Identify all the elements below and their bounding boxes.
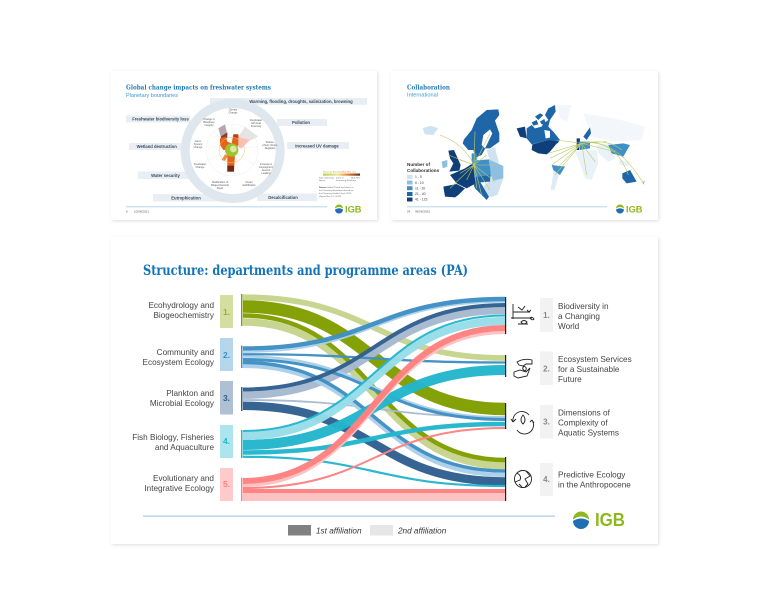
impact labels: [126, 98, 367, 202]
legend: number of collaborations: [407, 162, 440, 202]
icon: complexity water cycle: [511, 411, 534, 434]
legend: control variable: the Planetary Boundaries based on: [319, 189, 354, 192]
logo: IGB: [616, 204, 643, 214]
chart labels: Ocean: [245, 181, 253, 184]
impact label text: Decalcification: [268, 195, 298, 200]
chart labels: with beat: [251, 122, 261, 125]
department number boxes: 5.: [223, 479, 230, 489]
chart labels: Biosphere: [203, 121, 215, 124]
legend: control variable: (Figure Rev 2.1, 2023): [319, 195, 341, 198]
programme area labels: Aquatic Systems: [558, 428, 619, 438]
legend: number of collaborations: 21 - 40: [415, 192, 426, 196]
logo: IGB: IGB: [626, 204, 643, 214]
chart labels: Freshwater: [194, 163, 206, 166]
logo: IGB: IGB: [595, 510, 625, 530]
programme area labels: for a Sustainable: [558, 365, 620, 374]
chart labels: Acidification: [242, 184, 256, 187]
icon: globe with arrows: [514, 470, 532, 488]
chart labels: [194, 108, 278, 190]
chart labels: pheric Ozone: [263, 144, 278, 147]
logo: IGB: IGB: [345, 204, 362, 214]
legend: control variable: Global Threat and status of: [327, 186, 354, 189]
department number boxes: [220, 295, 233, 501]
map: world: [517, 105, 645, 190]
programme area labels: World: [558, 322, 580, 331]
logo: IGB: [335, 204, 362, 214]
programme area number boxes: 3.: [543, 418, 550, 426]
programme area labels: Predictive Ecology: [558, 470, 626, 480]
legend: control variable: High Risk: [351, 178, 361, 180]
impact label text: Water security: [151, 173, 181, 178]
title: Structure: departments and programme areas (PA): [143, 263, 468, 279]
chart labels: System: [194, 143, 202, 146]
footer: 6: [126, 210, 128, 214]
logo: IGB: [573, 510, 625, 530]
chart labels: Increase in: [260, 163, 273, 166]
programme area labels: in the Anthropocene: [558, 480, 631, 490]
legend: control variable: Source:: [319, 187, 327, 189]
chart labels: Atmospheric: [259, 166, 274, 169]
footer: 06/06/2022: [415, 210, 430, 214]
legend: control variable: [319, 170, 361, 198]
legend: control variable: Zone: [351, 180, 357, 182]
map: Europe: [442, 109, 503, 200]
chart labels: Land-: [195, 140, 201, 143]
legend: control variable: Safe Operating: [319, 176, 334, 180]
department labels: Evolutionary and: [153, 474, 214, 483]
chart labels: Aerosol: [262, 169, 271, 172]
department labels: and Aquaculture: [155, 443, 214, 452]
department number boxes: 3.: [223, 393, 230, 403]
programme area number boxes: 1.: [543, 311, 550, 320]
impact label text: Eutrophication: [171, 195, 201, 200]
chart labels: Change: [229, 112, 238, 114]
legend: control variable: Zone of: [336, 178, 344, 180]
programme area labels: Biodiversity in: [558, 302, 609, 311]
programme area labels: Ecosystem Services: [558, 355, 632, 364]
subheading: planetary boundaries: Planetary boundaries: [126, 93, 178, 99]
chart labels: Change in: [203, 118, 215, 121]
sankey flows: [243, 297, 505, 497]
legend: number of collaborations: Number of: [407, 162, 430, 167]
legend: affiliation: 1st affiliation: [316, 526, 362, 536]
legend: affiliation: 2nd affiliation: [397, 526, 447, 536]
collaboration lines: Europe: [440, 132, 497, 195]
chart labels: Freshwater: [250, 119, 262, 122]
department labels: [132, 301, 215, 493]
programme area labels: Complexity of: [558, 418, 608, 428]
impact label text: Warming, flooding, droughts, salinization, browning: [249, 99, 353, 104]
legend: affiliation: [288, 525, 447, 536]
department number boxes: 4.: [223, 436, 230, 446]
department labels: Ecohydrology and: [148, 301, 214, 310]
panel: international collaboration slide: [391, 71, 658, 220]
programme area number boxes: 4.: [543, 475, 550, 484]
chart labels: Loading: [262, 172, 271, 175]
chart labels: browning: [251, 125, 262, 128]
legend: number of collaborations: Collaborations: [407, 168, 440, 173]
footer rule: [143, 516, 555, 517]
programme area labels: Dimensions of: [558, 408, 611, 418]
legend: control variable: the Planetary Health Check 2024: [319, 192, 352, 195]
map: Iceland: [423, 126, 438, 135]
department labels: Integrative Ecology: [144, 484, 215, 493]
chart labels: Climate: [229, 108, 238, 112]
programme area node bars: [505, 297, 506, 501]
legend: control variable: Increasing Risk: [336, 179, 352, 182]
ring and radial chart: [185, 104, 280, 198]
impact label text: Increased UV damage: [295, 143, 339, 148]
panel: structure slide: [111, 237, 658, 544]
legend: control variable: Planetary Boundary: [323, 170, 343, 174]
footer: [407, 206, 607, 214]
department number boxes: 1.: [223, 307, 230, 317]
legend: number of collaborations: 6 - 10: [415, 181, 424, 185]
chart labels: Change: [196, 166, 205, 169]
impact label text: Wetland destruction: [137, 144, 177, 149]
chart labels: Change: [194, 146, 203, 149]
department labels: Ecosystem Ecology: [143, 358, 215, 367]
department node bars: [241, 294, 242, 501]
department labels: Plankton and: [166, 389, 214, 398]
legend: control variable: Space: [319, 180, 326, 182]
legend: number of collaborations: 11 - 20: [415, 186, 425, 190]
chart labels: Biogeochemical: [211, 184, 229, 187]
heading: collaboration: Collaboration: [407, 84, 450, 92]
panel: planetary boundaries slide: [111, 71, 377, 220]
programme area number boxes: [540, 298, 553, 496]
impact label text: Freshwater biodiversity loss: [132, 116, 189, 122]
subheading: international: International: [407, 92, 438, 98]
footer: 10/06/2021: [134, 210, 149, 214]
programme area labels: [558, 302, 632, 490]
legend: number of collaborations: 41 - 123: [415, 198, 428, 202]
programme area number boxes: 2.: [543, 364, 550, 374]
impact label text: Pollution: [292, 120, 310, 125]
legend: number of collaborations: 1 - 5: [415, 175, 422, 179]
legend: control variable: High Risk Line: [342, 172, 357, 174]
collaboration lines: world: [548, 140, 643, 183]
department number boxes: 2.: [223, 350, 230, 360]
chart labels: Flows: [217, 187, 224, 190]
chart labels: Depletion: [265, 147, 276, 150]
department labels: Fish Biology, Fisheries: [132, 433, 214, 442]
icon: biodiversity: [511, 304, 534, 324]
programme area labels: Future: [558, 375, 582, 384]
chart labels: Modification of: [212, 181, 228, 184]
chart labels: Integrity: [205, 124, 214, 127]
icon: ecosystem services hands: [514, 359, 532, 378]
footer: 24: [407, 210, 411, 214]
department labels: Microbial Ecology: [150, 399, 215, 408]
department labels: Biogeochemistry: [153, 311, 215, 320]
chart labels: Stratos-: [266, 141, 275, 144]
department labels: Community and: [157, 348, 214, 357]
programme area labels: a Changing: [558, 312, 600, 321]
impact label text: [132, 99, 353, 200]
footer: [126, 206, 327, 214]
heading: global change impacts: Global change impacts on freshwater systems: [126, 84, 271, 92]
